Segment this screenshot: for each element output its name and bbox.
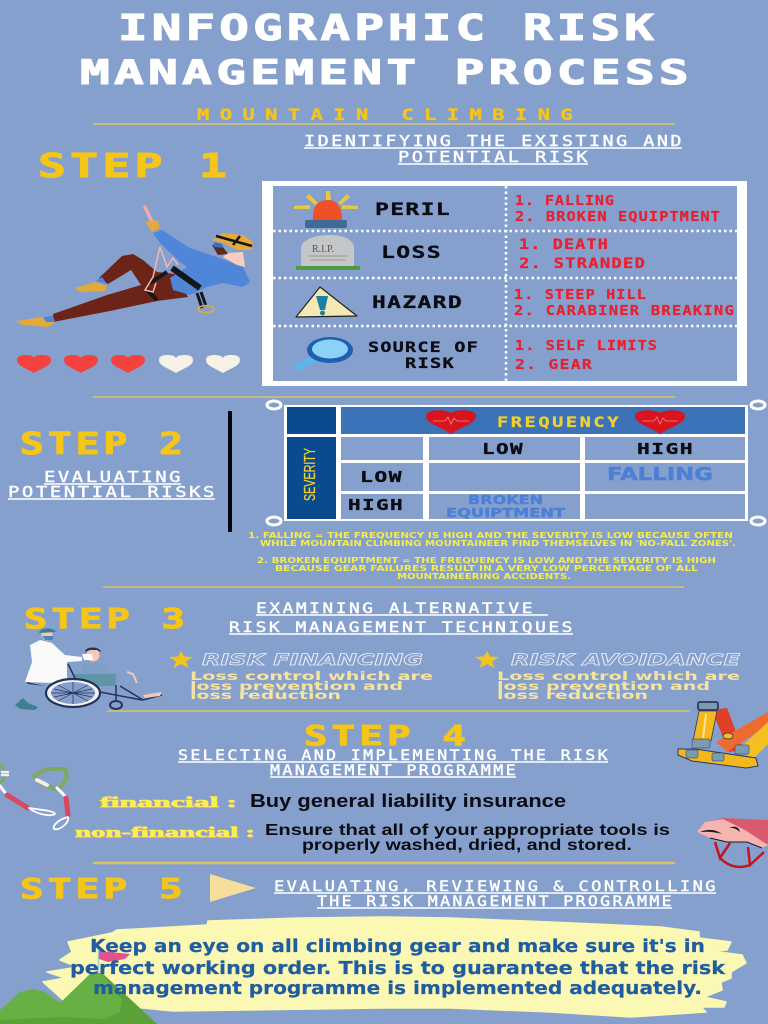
step 5 description: EVALUATING, REVIEWING & CONTROLLING [274, 879, 718, 895]
step 1 description [304, 132, 684, 166]
column label: low: LOW [482, 440, 524, 458]
illustration: climber on a rope [16, 207, 253, 327]
label: source of risk: SOURCE OF [368, 340, 479, 356]
text: loss control: loss reduction [190, 688, 341, 702]
step 5 description [274, 879, 718, 910]
icon: heart left [426, 410, 476, 434]
step 3 description: RISK MANAGEMENT TECHNIQUES [229, 620, 575, 636]
heading: step 2: STEP 2 [20, 427, 187, 462]
text: loss control: Loss control which are [497, 669, 740, 683]
subtitle: mountain climbing: MOUNTAIN CLIMBING [197, 105, 583, 124]
text: loss control [190, 669, 433, 702]
list: hazards: 2. CARABINER BREAKING [514, 304, 735, 319]
title: INFOGRAPHIC RISK [118, 8, 658, 49]
icon: star [475, 651, 499, 668]
list: sources of risk [515, 339, 658, 373]
step 4 description: MANAGEMENT PROGRAMME [270, 763, 518, 779]
cell: broken equiptment: BROKEN [468, 493, 543, 507]
cell: falling: FALLING [607, 464, 713, 485]
list: sources of risk: 2. GEAR [515, 358, 593, 373]
label: financial [100, 795, 238, 812]
label: hazard: HAZARD [372, 293, 463, 313]
label: non-financial [75, 825, 256, 842]
label: source of risk: RISK [405, 356, 455, 372]
cell: broken equiptment: EQUIPTMENT [446, 506, 566, 520]
label: non-financial: non-financial : [76, 826, 256, 842]
icon: star [169, 651, 193, 668]
text: loss control: loss prevention and [190, 679, 403, 693]
illustration: climbing helmet [697, 818, 768, 867]
item: risk avoidance [475, 650, 740, 702]
icon: magnifying glass [293, 337, 353, 371]
callout text: keep an eye [70, 936, 726, 999]
notes: matrix explanation: BECAUSE GEAR FAILURES RESULT IN A VERY LOW PERCENTAGE OF ALL [275, 564, 698, 573]
notes: matrix explanation: 2. BROKEN EQUIPTMENT = THE FREQUENCY IS LOW AND THE SEVERITY IS HIGH [257, 556, 716, 565]
column label: high: HIGH [637, 440, 694, 458]
text: financial action: Buy general liability insurance [250, 790, 566, 811]
text: loss control: Loss control which are [190, 669, 433, 683]
panel: risk identification table [262, 181, 747, 386]
arrow: step 5 triangle [210, 874, 256, 902]
list: losses: 2. STRANDED [519, 256, 646, 272]
notes: matrix explanation: MOUNTAINEERING ACCIDENTS. [397, 572, 571, 581]
header: severity: SEVERITY [302, 448, 319, 501]
title: MANAGEMENT PROCESS [80, 53, 693, 93]
step 3 description [229, 601, 575, 636]
text: loss control: loss reduction [497, 688, 648, 702]
notes: matrix explanation [248, 531, 736, 581]
panel: frequency / severity matrix [267, 401, 765, 525]
label: non-financial: non-financial : [75, 825, 255, 841]
label: source of risk [368, 340, 479, 372]
illustration: mountains and flag [0, 950, 157, 1024]
row label: high: HIGH [348, 496, 404, 514]
icon: heart right [635, 410, 685, 434]
cell: broken equiptment [446, 493, 566, 520]
text: loss control: loss prevention and [497, 679, 710, 693]
label: loss: LOSS [381, 243, 442, 263]
list: perils [515, 194, 721, 225]
subheading: risk financing: RISK FINANCING [202, 650, 423, 669]
illustration: nurse and wheelchair [15, 628, 162, 710]
list: hazards [514, 288, 735, 319]
heading: step 5: STEP 5 [20, 872, 187, 905]
heading: step 1: STEP 1 [38, 146, 231, 185]
row label: low: LOW [360, 468, 403, 486]
step 3 description: EXAMINING ALTERNATIVE [256, 601, 535, 617]
step 1 description: POTENTIAL RISK [398, 148, 590, 166]
text: non-financial action [265, 822, 670, 854]
step 2 description: POTENTIAL RISKS [8, 483, 217, 501]
step 4 description [178, 748, 610, 779]
step 2 description [8, 468, 217, 501]
icon: hazard triangle [296, 287, 357, 317]
text: non-financial action: Ensure that all of your appropriate tools is [265, 822, 670, 839]
notes: matrix explanation: 1. FALLING = THE FREQUENCY IS HIGH AND THE SEVERITY IS LOW BECAUSE OFTEN [248, 531, 733, 540]
illustration: carabiners [0, 765, 68, 829]
hearts: rating [17, 355, 240, 373]
item: risk financing [169, 650, 433, 702]
step 5 description: THE RISK MANAGEMENT PROGRAMME [317, 894, 674, 910]
text: non-financial action: properly washed, dried, and stored. [302, 837, 632, 854]
text: loss control [497, 669, 740, 702]
list: perils: 2. BROKEN EQUIPTMENT [515, 210, 721, 225]
callout text: keep an eye: management programme is implemented adequately. [93, 978, 702, 999]
list: hazards: 1. STEEP HILL [514, 288, 647, 303]
list: sources of risk: 1. SELF LIMITS [515, 339, 658, 354]
list: perils: 1. FALLING [515, 194, 615, 209]
notes: matrix explanation: WHILE MOUNTAIN CLIMBING MOUNTAINEER FIND THEMSELVES IN 'NO-FALL ZONES'. [260, 539, 736, 548]
icon: siren [294, 191, 358, 228]
title [80, 8, 693, 93]
label: peril: PERIL [375, 200, 451, 220]
step 4 description: SELECTING AND IMPLEMENTING THE RISK [178, 748, 610, 764]
callout text: keep an eye: Keep an eye on all climbing gear and make sure it's in [90, 936, 705, 957]
heading: step 3: STEP 3 [24, 602, 189, 635]
panel: yellow brush stroke [43, 917, 746, 1017]
illustration: climbing harness [678, 702, 768, 768]
step 1 description: IDENTIFYING THE EXISTING AND [304, 132, 684, 150]
icon: tombstone [296, 235, 360, 270]
heading: step 4: STEP 4 [304, 719, 470, 752]
step 2 description: EVALUATING [44, 468, 183, 486]
subheading: risk avoidance: RISK AVOIDANCE [511, 650, 740, 669]
header: frequency: FREQUENCY [497, 415, 621, 431]
icon: tombstone: R.I.P. [312, 244, 334, 255]
list: losses [519, 237, 646, 272]
list: losses: 1. DEATH [519, 237, 609, 253]
label: financial: financial : [101, 796, 238, 812]
callout text: keep an eye: perfect working order. This is to guarantee that the risk [70, 958, 726, 979]
label: financial: financial : [100, 795, 237, 811]
